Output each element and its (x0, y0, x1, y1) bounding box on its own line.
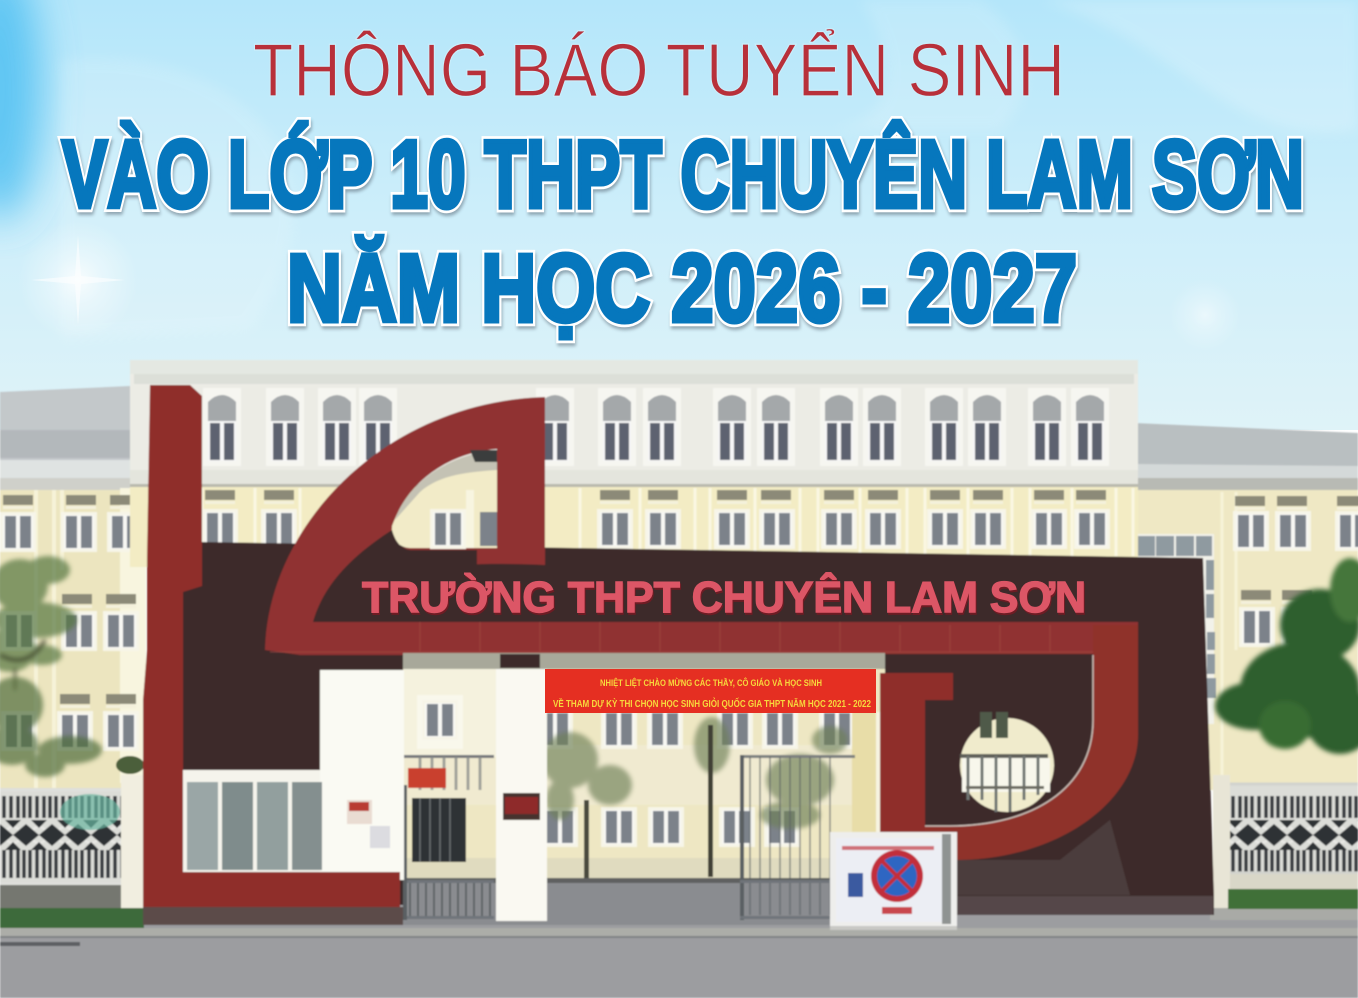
title: main line 2: NĂM HỌC 2026 - 2027 (288, 238, 1078, 345)
red logo: inner column (880, 673, 953, 858)
title: main line 2: NĂM HỌC 2026 - 2027 (287, 235, 1077, 342)
small potted shrub (116, 756, 144, 774)
weathered lower wall (143, 820, 1213, 925)
side building wings (0, 478, 1358, 800)
white pillar (496, 669, 547, 921)
parking sign box (830, 832, 957, 930)
side roofs (0, 386, 1358, 480)
red welcome banner (545, 669, 876, 713)
left fence (0, 775, 143, 908)
red welcome banner: NHIỆT LIỆT CHÀO MỪNG CÁC THẦY, CÔ GIÁO VÀ HỌC SINH (600, 677, 822, 689)
left tree (0, 556, 102, 777)
right gate leaf (740, 755, 855, 920)
dark band under arc (313, 530, 1199, 622)
photo of school gate (0, 360, 1358, 998)
left white block (183, 670, 404, 880)
light edge of curve (925, 655, 1093, 826)
arc opening with building behind (392, 450, 497, 549)
main building second floor (130, 487, 1138, 567)
dark brown wall (178, 542, 1214, 915)
ground and road (0, 905, 1358, 998)
circular opening (960, 712, 1054, 812)
red welcome banner: VỀ THAM DỰ KỲ THI CHỌN HỌC SINH GIỎI QUỐC GIA THPT NĂM HỌC 2021 - 2022 (553, 696, 871, 710)
title: main line 2: NĂM HỌC 2026 - 2027 (287, 235, 1077, 342)
sky background (0, 0, 1358, 430)
right tree (1215, 558, 1358, 754)
title: announcement line: THÔNG BÁO TUYỂN SINH (253, 28, 1065, 112)
red logo: left column and base (143, 385, 400, 907)
main building upper floor (130, 360, 1138, 488)
school sign lettering: TRƯỜNG THPT CHUYÊN LAM SƠN (362, 572, 1086, 622)
school sign lettering: TRƯỜNG THPT CHUYÊN LAM SƠN (363, 574, 1087, 624)
red logo: right curved section (925, 625, 1138, 860)
hedges (0, 889, 1358, 928)
left gate leaf (403, 755, 494, 920)
right fence (1213, 775, 1358, 908)
gate opening (403, 653, 885, 925)
red logo: arc with opening (265, 397, 1138, 655)
arc panel seams (270, 622, 1138, 652)
